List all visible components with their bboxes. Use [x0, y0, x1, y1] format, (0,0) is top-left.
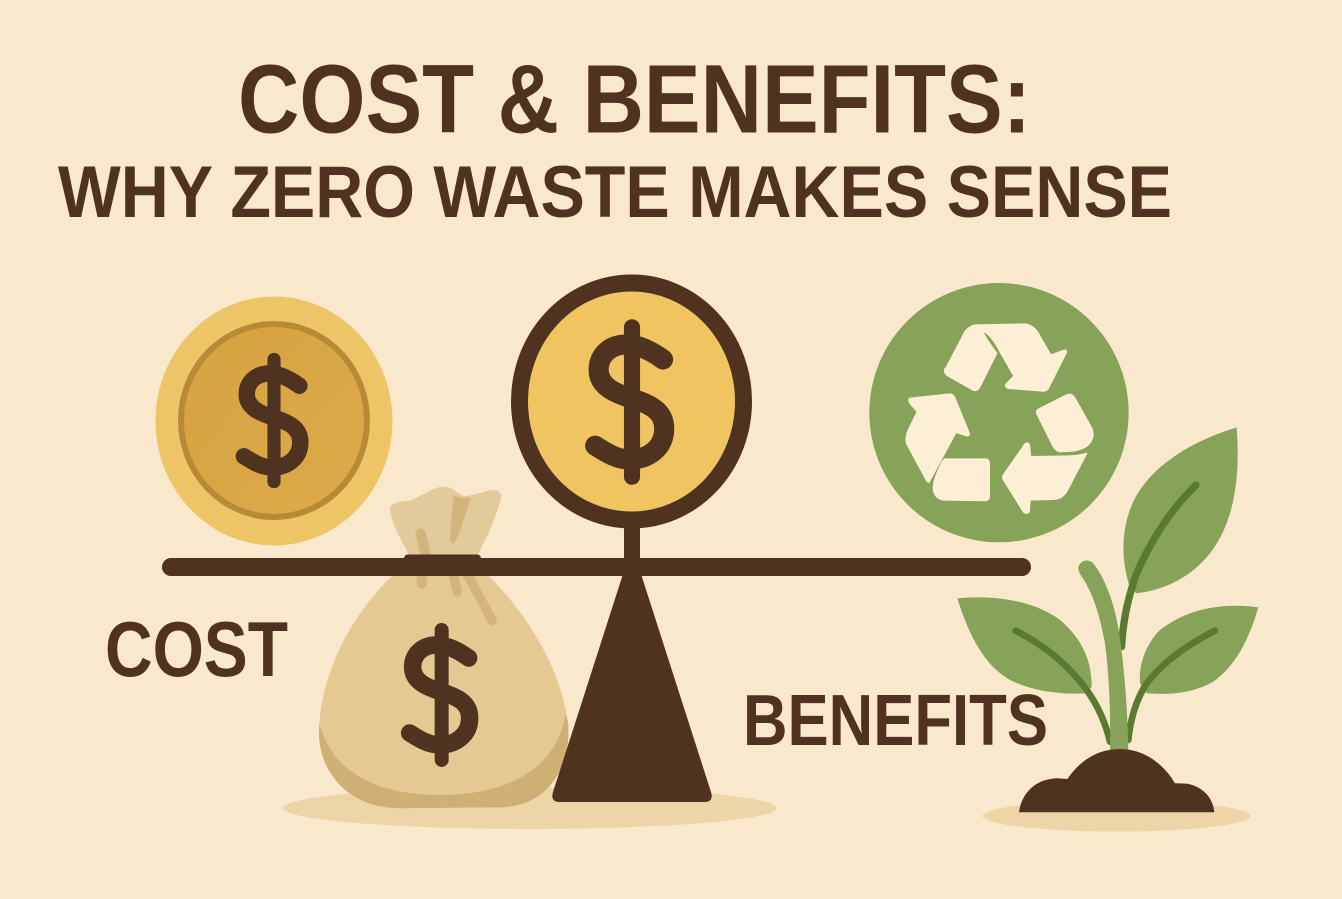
bag tie on beam	[404, 554, 481, 570]
title line 1: COST & BENEFITS:	[238, 44, 1031, 154]
icon: center coin	[520, 283, 744, 520]
fulcrum	[552, 574, 712, 802]
icon: recycling symbol in green circle	[869, 283, 1129, 542]
icon: sprouting plant	[957, 427, 1258, 812]
beam	[162, 558, 1031, 576]
icon: money bag	[319, 487, 568, 808]
balance scale	[162, 283, 1031, 802]
label: cost: COST	[105, 607, 288, 693]
title line 2: WHY ZERO WASTE MAKES SENSE	[58, 150, 1172, 233]
ground shadow under plant	[982, 800, 1250, 832]
post	[624, 520, 640, 565]
ground shadow under bag and fulcrum	[283, 787, 777, 829]
icon: gold coin (cost side)	[156, 296, 392, 546]
label: benefits: BENEFITS	[743, 680, 1048, 761]
